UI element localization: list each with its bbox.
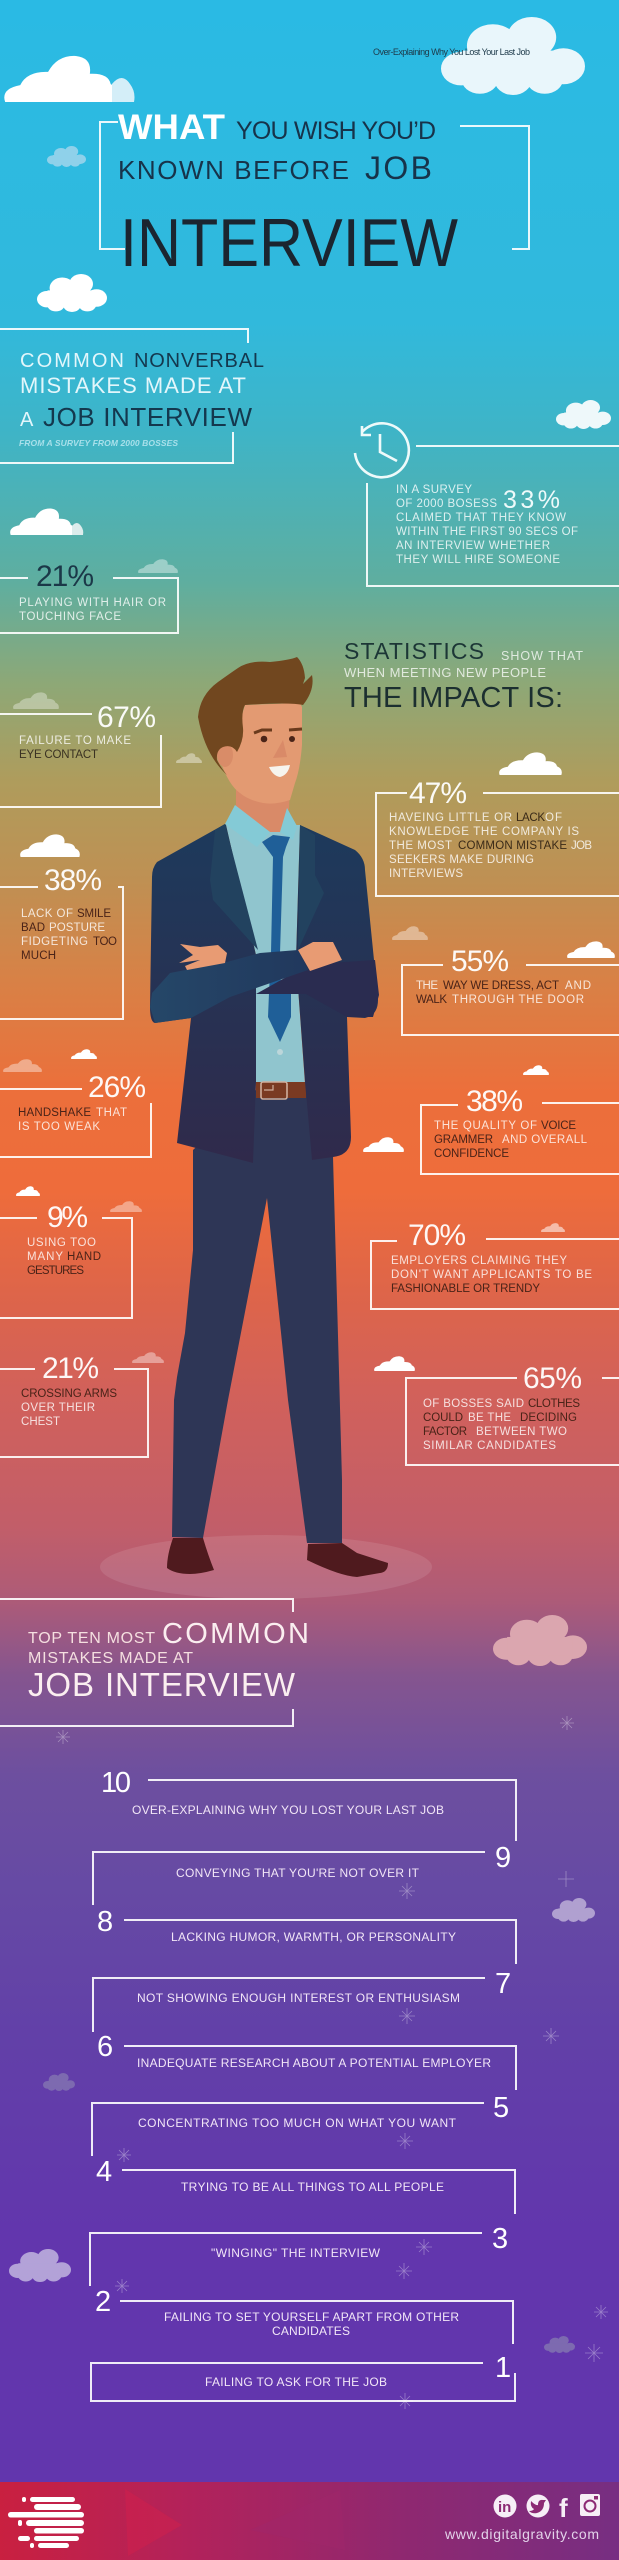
ear xyxy=(217,743,233,767)
panel: 38 percent smile posture: FIDGETING xyxy=(21,936,88,948)
cloud right of nonverbal heading xyxy=(556,400,611,429)
panel: 65 percent clothes: DECIDING xyxy=(520,1412,577,1424)
panel: 38 percent smile posture xyxy=(0,864,123,1019)
panel: 55 percent dress: THE xyxy=(416,980,438,992)
nose shadow xyxy=(273,740,287,758)
list item 7: NOT SHOWING ENOUGH INTEREST OR ENTHUSIASM xyxy=(137,1991,460,2005)
panel: 70 percent fashionable: EMPLOYERS CLAIMING THEY xyxy=(391,1255,567,1267)
statistics heading: THE IMPACT IS: xyxy=(344,682,563,714)
panel: 33 percent survey: CLAIMED THAT THEY KNOW xyxy=(396,512,566,524)
panel: 21 percent crossing arms xyxy=(0,1352,148,1457)
list item 9: 9 xyxy=(495,1842,511,1874)
panel: 38 percent smile posture: POSTURE xyxy=(49,922,105,934)
cloud above 38 percent xyxy=(20,834,80,857)
title words known before: KNOWN BEFORE xyxy=(118,155,349,185)
list item 2: FAILING TO SET YOURSELF APART FROM OTHER xyxy=(164,2310,459,2324)
panel: 47 percent knowledge: OF xyxy=(545,812,562,824)
panel: 55 percent dress: WALK xyxy=(416,994,447,1006)
left lapel xyxy=(210,824,258,950)
list item 2: 2 xyxy=(95,2286,111,2318)
panel: 65 percent clothes: CLOTHES xyxy=(528,1398,580,1410)
panel: 47 percent knowledge: SEEKERS MAKE DURING xyxy=(389,854,534,866)
shirt xyxy=(226,825,305,1084)
clouds above 26 percent xyxy=(3,1049,97,1072)
smile xyxy=(269,765,290,777)
website url: www.digitalgravity.com xyxy=(444,2526,599,2542)
panel: 55 percent dress: 55% xyxy=(451,945,509,978)
panel: 21 percent crossing arms: CHEST xyxy=(21,1416,60,1428)
clouds above 9 percent xyxy=(16,1186,142,1212)
nonverbal mistakes heading: MISTAKES MADE AT xyxy=(20,373,246,398)
list item 4: TRYING TO BE ALL THINGS TO ALL PEOPLE xyxy=(181,2180,444,2194)
cloud top left xyxy=(4,56,135,102)
top ten heading: TOP TEN MOST xyxy=(28,1630,155,1647)
panel: 70 percent fashionable xyxy=(371,1219,619,1309)
panel: 47 percent knowledge: KNOWLEDGE THE COMPANY IS xyxy=(389,826,579,838)
list item 5: 5 xyxy=(493,2092,509,2124)
panel: 47 percent knowledge: COMMON MISTAKE xyxy=(458,840,567,852)
panel: 38 percent voice: VOICE xyxy=(541,1120,576,1132)
white cloud below title xyxy=(37,274,107,312)
right hand xyxy=(298,942,342,971)
panel: 65 percent clothes: SIMILAR CANDIDATES xyxy=(423,1440,556,1452)
top caption: Over-Explaining Why You Lost Your Last Job xyxy=(373,47,530,57)
panel: 38 percent smile posture: MUCH xyxy=(21,950,56,962)
logo xyxy=(8,2497,84,2548)
panel: 38 percent smile posture: SMILE xyxy=(77,908,111,920)
cloud above 38 percent voice xyxy=(523,1065,549,1075)
top ten heading: JOB INTERVIEW xyxy=(28,1666,296,1703)
panel: 67 percent eye contact xyxy=(0,701,161,807)
cloud above 47 percent xyxy=(499,752,562,775)
panel: 9 percent hand gestures: HAND xyxy=(67,1251,101,1263)
list item 5: CONCENTRATING TOO MUCH ON WHAT YOU WANT xyxy=(138,2116,457,2130)
panel: 21 percent crossing arms: CROSSING ARMS xyxy=(21,1388,117,1400)
left forearm xyxy=(150,950,308,1023)
panel: 33 percent survey: IN A SURVEY xyxy=(396,484,472,496)
cloud beside 38 percent voice xyxy=(363,1137,404,1152)
panel: 55 percent dress: THROUGH THE DOOR xyxy=(452,994,584,1006)
panel: 21 percent hair: PLAYING WITH HAIR OR xyxy=(19,597,166,609)
list item 10: OVER-EXPLAINING WHY YOU LOST YOUR LAST JOB xyxy=(132,1803,444,1817)
left hand xyxy=(179,944,227,970)
faint cloud above 67 percent xyxy=(13,692,59,709)
sparkle stars xyxy=(56,1716,608,2409)
icon: clock xyxy=(355,423,409,477)
panel: 67 percent eye contact: FAILURE TO MAKE xyxy=(19,735,131,747)
statistics heading: SHOW THAT xyxy=(501,649,583,663)
panel: 38 percent voice: 38% xyxy=(466,1085,523,1118)
purple cloud four xyxy=(544,2336,575,2353)
panel: 65 percent clothes: OF BOSSES SAID xyxy=(423,1398,524,1410)
panel: 38 percent voice: GRAMMER xyxy=(434,1134,493,1146)
panel: 65 percent clothes: COULD xyxy=(423,1412,463,1424)
statistics heading: WHEN MEETING NEW PEOPLE xyxy=(344,665,546,680)
panel: 65 percent clothes: 65% xyxy=(523,1362,582,1395)
cloud above 65 percent xyxy=(374,1356,415,1371)
right shoe xyxy=(307,1543,388,1577)
nonverbal mistakes heading: COMMON xyxy=(20,350,124,372)
list item 2 xyxy=(95,2286,513,2344)
panel: 38 percent smile posture: BAD xyxy=(21,922,45,934)
list item 1: 1 xyxy=(495,2352,511,2384)
top ten heading: MISTAKES MADE AT xyxy=(28,1650,193,1667)
panel: 47 percent knowledge: HAVEING LITTLE OR xyxy=(389,812,512,824)
cloud top right xyxy=(441,17,585,95)
list item 10: 10 xyxy=(101,1767,131,1799)
icon: linkedin: in xyxy=(498,2499,511,2516)
panel: 65 percent clothes: FACTOR xyxy=(423,1426,467,1438)
panel: 47 percent knowledge: LACK xyxy=(516,812,545,824)
list item 6: INADEQUATE RESEARCH ABOUT A POTENTIAL EMPLOYER xyxy=(137,2056,491,2070)
list item 6: 6 xyxy=(97,2031,113,2063)
panel: 9 percent hand gestures xyxy=(0,1201,132,1318)
icon: facebook: f xyxy=(559,2493,568,2523)
panel: 55 percent dress xyxy=(402,945,619,1035)
list item 8 xyxy=(97,1906,516,1964)
panel: 38 percent smile posture: 38% xyxy=(44,864,102,897)
hair xyxy=(198,657,313,775)
panel: 9 percent hand gestures: GESTURES xyxy=(27,1265,84,1277)
illustration: businessman xyxy=(150,657,388,1577)
panel: 9 percent hand gestures: USING TOO xyxy=(27,1237,96,1249)
title word job: JOB xyxy=(365,150,432,186)
panel: 33 percent survey: THEY WILL HIRE SOMEONE xyxy=(396,554,560,566)
list item 1: FAILING TO ASK FOR THE JOB xyxy=(205,2375,387,2389)
panel: 55 percent dress: AND xyxy=(565,980,591,992)
panel: 47 percent knowledge: THE MOST xyxy=(389,840,452,852)
list item 3: 3 xyxy=(492,2223,508,2255)
left shoe xyxy=(167,1538,214,1574)
nonverbal mistakes heading: NONVERBAL xyxy=(134,350,264,372)
panel: 38 percent voice: AND OVERALL xyxy=(502,1134,588,1146)
faint cloud above 70 percent xyxy=(541,1223,565,1232)
panel: 47 percent knowledge: JOB xyxy=(571,840,592,852)
panel: 38 percent voice: CONFIDENCE xyxy=(434,1148,509,1160)
panel: 38 percent smile posture: LACK OF xyxy=(21,908,73,920)
panel: 26 percent handshake: HANDSHAKE xyxy=(18,1107,91,1119)
list item 7 xyxy=(93,1968,511,2032)
list item 3 xyxy=(90,2223,508,2286)
list item 7: 7 xyxy=(495,1968,511,2000)
list item 9: CONVEYING THAT YOU'RE NOT OVER IT xyxy=(176,1866,420,1880)
title word interview: INTERVIEW xyxy=(120,205,458,281)
clouds above 55 percent xyxy=(392,926,615,958)
list item 4: 4 xyxy=(96,2156,112,2188)
nonverbal mistakes heading xyxy=(0,329,264,463)
trousers xyxy=(172,1090,342,1543)
icon: instagram xyxy=(580,2494,600,2516)
list item 5 xyxy=(92,2092,509,2156)
panel: 21 percent hair: 21% xyxy=(36,560,94,593)
eyes xyxy=(261,736,295,742)
list item 3: "WINGING" THE INTERVIEW xyxy=(211,2246,381,2260)
faint cloud above 21 percent arms xyxy=(132,1352,164,1363)
icon: twitter xyxy=(526,2494,550,2518)
list item 4 xyxy=(96,2156,515,2214)
panel: 67 percent eye contact: EYE CONTACT xyxy=(19,749,98,761)
cloud right of top ten heading xyxy=(493,1615,587,1666)
statistics heading: STATISTICS xyxy=(344,638,484,664)
panel: 26 percent handshake xyxy=(0,1071,151,1157)
top ten heading: COMMON xyxy=(162,1618,309,1650)
list item 2: CANDIDATES xyxy=(272,2324,350,2338)
panel: 9 percent hand gestures: 9% xyxy=(47,1201,88,1234)
purple cloud one xyxy=(552,1898,595,1922)
eyebrows xyxy=(254,729,302,733)
list item 6 xyxy=(97,2031,516,2090)
floor shadow ellipse xyxy=(100,1535,432,1599)
panel: 47 percent knowledge: 47% xyxy=(409,777,467,810)
panel: 70 percent fashionable: FASHIONABLE OR TRENDY xyxy=(391,1283,540,1295)
title words you wish: YOU WISH YOU’D xyxy=(236,117,436,145)
panel: 21 percent hair xyxy=(0,560,178,633)
jacket xyxy=(150,824,378,1163)
panel: 47 percent knowledge: INTERVIEWS xyxy=(389,868,463,880)
panel: 21 percent hair: TOUCHING FACE xyxy=(19,611,121,623)
panel: 21 percent crossing arms: 21% xyxy=(42,1352,99,1385)
panel: 33 percent survey xyxy=(367,446,619,586)
panel: 38 percent voice xyxy=(421,1085,619,1174)
panel: 38 percent smile posture: TOO xyxy=(93,936,117,948)
list item 1 xyxy=(91,2352,515,2401)
faint cloud by 21 percent xyxy=(138,559,178,573)
panel: 33 percent survey: AN INTERVIEW WHETHER xyxy=(396,540,550,552)
panel: 65 percent clothes xyxy=(406,1362,619,1465)
panel: 26 percent handshake: IS TOO WEAK xyxy=(18,1121,100,1133)
footer band xyxy=(0,2482,619,2560)
main title block xyxy=(100,108,529,281)
panel: 33 percent survey: WITHIN THE FIRST 90 SECS OF xyxy=(396,526,578,538)
face xyxy=(219,703,302,804)
panel: 67 percent eye contact: 67% xyxy=(97,701,156,734)
top ten heading xyxy=(0,1599,309,1726)
panel: 38 percent voice: THE QUALITY OF xyxy=(434,1120,537,1132)
panel: 47 percent knowledge xyxy=(376,777,619,896)
belt xyxy=(256,1082,306,1099)
panel: 65 percent clothes: BE THE xyxy=(468,1412,511,1424)
statistics heading xyxy=(344,638,583,714)
right lapel xyxy=(298,825,324,950)
faint cloud beside man xyxy=(176,753,202,763)
list item 8: LACKING HUMOR, WARMTH, OR PERSONALITY xyxy=(171,1930,456,1944)
purple cloud two xyxy=(43,2073,75,2091)
list item 9 xyxy=(93,1842,511,1905)
list item 10 xyxy=(101,1767,516,1841)
panel: 33 percent survey: OF 2000 BOSESS xyxy=(396,498,497,510)
purple cloud three xyxy=(9,2249,71,2282)
nonverbal mistakes heading: A xyxy=(20,409,34,431)
shirt collar xyxy=(225,805,297,847)
shirt button xyxy=(277,1049,283,1055)
panel: 65 percent clothes: BETWEEN TWO xyxy=(476,1426,567,1438)
panel: 26 percent handshake: 26% xyxy=(88,1071,146,1104)
panel: 9 percent hand gestures: MANY xyxy=(27,1251,63,1263)
panel: 33 percent survey: 33% xyxy=(503,486,560,514)
panel: 55 percent dress: WAY WE DRESS, ACT xyxy=(443,980,559,992)
neck xyxy=(236,790,290,832)
icon: linkedin xyxy=(494,2494,516,2518)
list item 8: 8 xyxy=(97,1906,113,1938)
right forearm xyxy=(256,960,379,1017)
panel: 21 percent crossing arms: OVER THEIR xyxy=(21,1402,95,1414)
cloud above 21 percent xyxy=(10,509,83,535)
nonverbal mistakes heading: JOB INTERVIEW xyxy=(43,402,252,432)
panel: 70 percent fashionable: 70% xyxy=(408,1219,466,1252)
tie xyxy=(262,835,291,1042)
small cloud beside title xyxy=(47,146,86,167)
title word what: WHAT xyxy=(118,108,225,147)
nonverbal mistakes heading: FROM A SURVEY FROM 2000 BOSSES xyxy=(19,438,178,448)
panel: 26 percent handshake: THAT xyxy=(96,1107,127,1119)
panel: 70 percent fashionable: DON'T WANT APPLICANTS TO BE xyxy=(391,1269,592,1281)
